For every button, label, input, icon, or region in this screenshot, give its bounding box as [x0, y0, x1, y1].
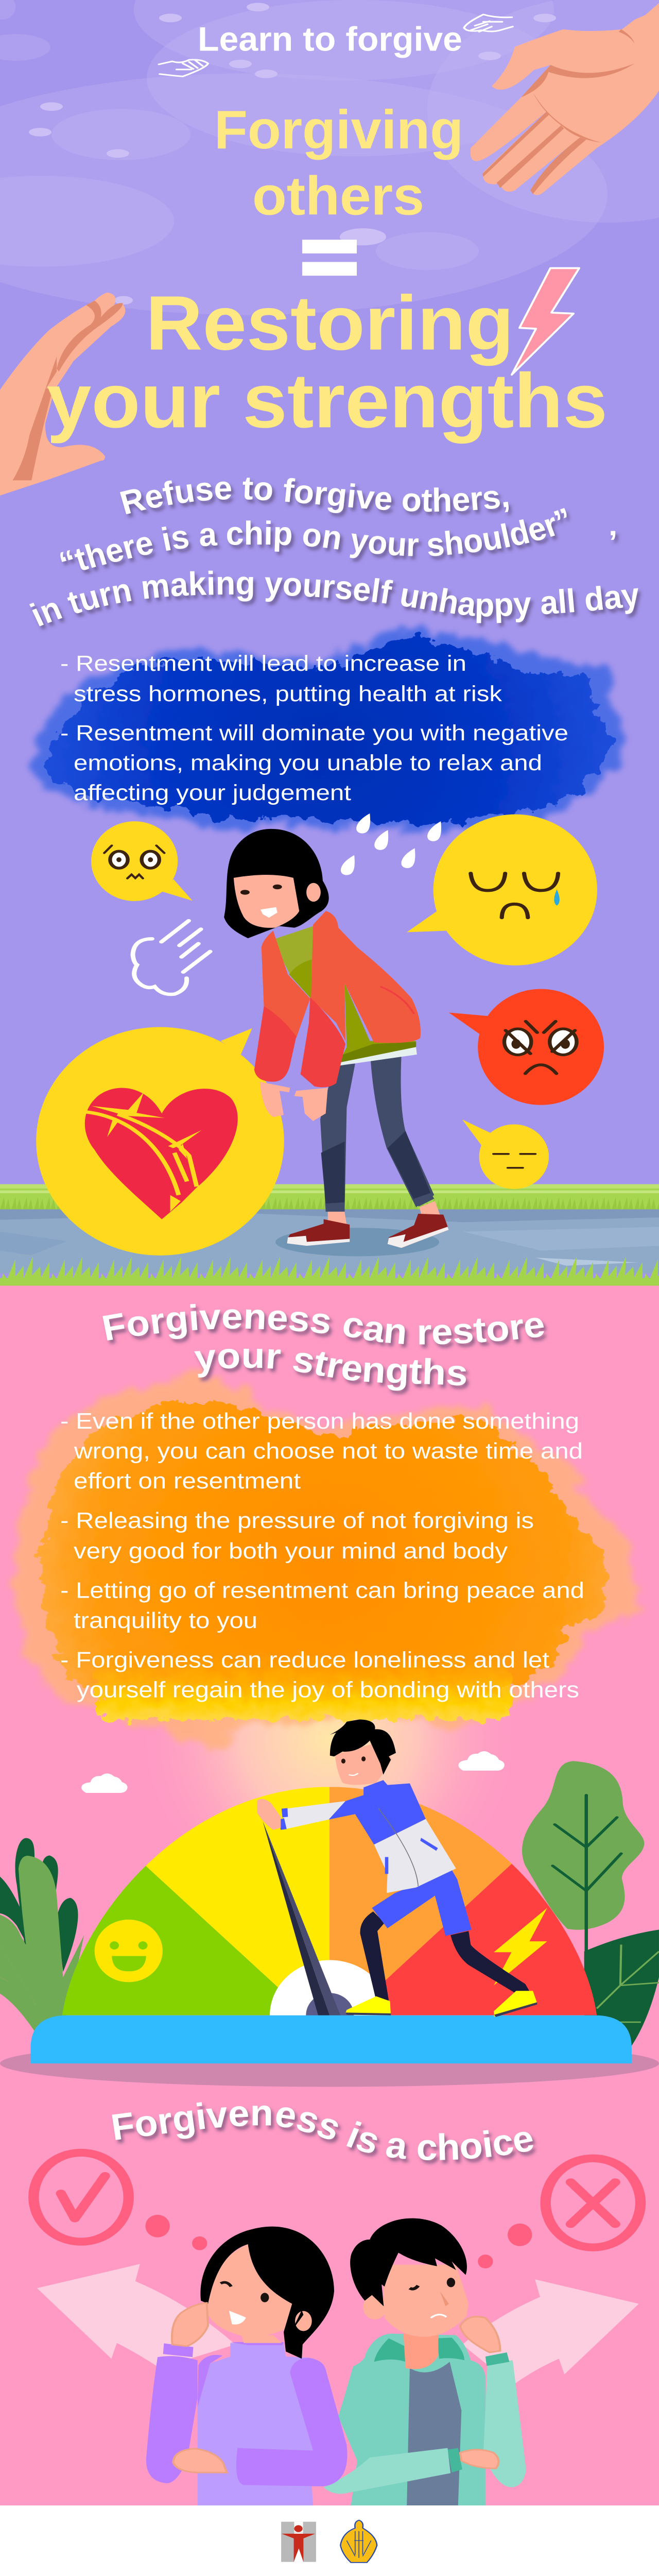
- curved heading: refuse to forgive: “there is a chip on your shoulder”: [60, 508, 571, 575]
- icon: check circle: [33, 2153, 129, 2242]
- text block: forgiveness bullets: - Releasing the pressure of not forgiving is: [60, 1508, 534, 1533]
- icon: lightning bolt: [512, 268, 579, 375]
- curved heading: forgiveness can restore: [102, 1303, 548, 1396]
- illustration: tired woman: [224, 829, 449, 1248]
- icon: small pointing hand outline top: [464, 14, 513, 32]
- illustration: man pushing needle: [257, 1719, 537, 2017]
- ground: back grass band: [0, 1184, 659, 1209]
- text block: forgiveness bullets: - Even if the other person has done something: [60, 1409, 579, 1434]
- ground: front grass: [0, 1256, 659, 1285]
- illustration: woman thinking: [146, 2227, 348, 2505]
- heading: others: others: [252, 166, 424, 226]
- background: translucent bubbles: [0, 0, 659, 315]
- curved heading: forgiveness is a choice: Forgiveness is a choice: [112, 2102, 537, 2166]
- gauge: base and shadow: [0, 2015, 659, 2087]
- icon: big bubble with thorned heart: [36, 1027, 284, 1256]
- illustration: man thinking: [324, 2218, 526, 2505]
- road shadow under woman feet: [275, 1228, 439, 1256]
- heading: Restoring: Restoring: [146, 280, 514, 366]
- arrow: left: [37, 2264, 235, 2368]
- text block: resentment bullets: affecting your judgement: [74, 781, 351, 805]
- panel: pink lower section background: [0, 1285, 659, 2505]
- icon: angry speech bubble: [449, 989, 604, 1105]
- icon: sad speech bubble: [407, 815, 597, 965]
- text block: resentment bullets: - Resentment will lead to increase in: [60, 652, 466, 676]
- thought dots: [145, 2215, 532, 2268]
- curved heading: refuse to forgive: ,: [609, 509, 617, 541]
- panel: purple top section background: [0, 0, 659, 1285]
- text block: resentment bullets: emotions, making you unable to relax and: [74, 751, 542, 775]
- curved heading: forgiveness can restore: your strengths: [194, 1349, 471, 1396]
- icon: top right open hand: [471, 3, 659, 195]
- icon: clouds: [81, 1751, 505, 1793]
- sun glow behind gauge: [134, 1591, 525, 1885]
- plant: left leaves: [0, 1838, 84, 2035]
- gauge: dial sectors: [62, 1787, 597, 2015]
- heading: your strengths: your strengths: [47, 358, 608, 444]
- text block: forgiveness bullets: [60, 1409, 584, 1702]
- curved heading: forgiveness can restore: Forgiveness can restore: [102, 1303, 548, 1350]
- text block: resentment bullets: - Resentment will dominate you with negative: [60, 721, 568, 745]
- logo: health department figure: [281, 2522, 316, 2562]
- title: Learn to forgive: Learn to forgive: [198, 20, 462, 58]
- heading: Forgiving: Forgiving: [214, 99, 463, 160]
- panel: white footer background: [0, 2505, 659, 2576]
- ground: road: [0, 1209, 659, 1273]
- curved heading: refuse to forgive: [29, 478, 643, 631]
- curved heading: refuse to forgive: Refuse to forgive others,: [120, 478, 513, 519]
- text block: resentment bullets: stress hormones, putting health at risk: [74, 682, 502, 706]
- text block: forgiveness bullets: yourself regain the joy of bonding with others: [77, 1677, 579, 1702]
- curved heading: refuse to forgive: in turn making yourself unhappy all day: [29, 571, 643, 631]
- icon: worried speech bubble: [91, 821, 193, 901]
- plant: right leaves: [522, 1761, 659, 2054]
- icon: puff of breath: [133, 921, 210, 994]
- icon: rain drops: [341, 814, 441, 875]
- blue watercolor cloud: [30, 628, 631, 832]
- icon: bottom left hand: [0, 293, 126, 496]
- logo: yellow hands emblem: [340, 2520, 377, 2563]
- icon: equals sign: [302, 240, 357, 276]
- text block: forgiveness bullets: - Forgiveness can reduce loneliness and let: [60, 1647, 549, 1672]
- icon: small pointing hand outline bottom: [159, 60, 208, 76]
- text block: forgiveness bullets: effort on resentment: [74, 1468, 301, 1494]
- orange watercolor cloud: [12, 1369, 647, 1749]
- text block: resentment bullets: [60, 652, 568, 805]
- text block: forgiveness bullets: tranquility to you: [74, 1608, 257, 1633]
- arrow: right: [462, 2279, 639, 2385]
- text block: forgiveness bullets: very good for both your mind and body: [74, 1538, 508, 1564]
- text block: forgiveness bullets: - Letting go of resentment can bring peace and: [60, 1578, 584, 1603]
- text block: forgiveness bullets: wrong, you can choose not to waste time and: [74, 1438, 583, 1464]
- icon: neutral speech bubble: [462, 1120, 549, 1189]
- icon: cross circle: [546, 2158, 640, 2247]
